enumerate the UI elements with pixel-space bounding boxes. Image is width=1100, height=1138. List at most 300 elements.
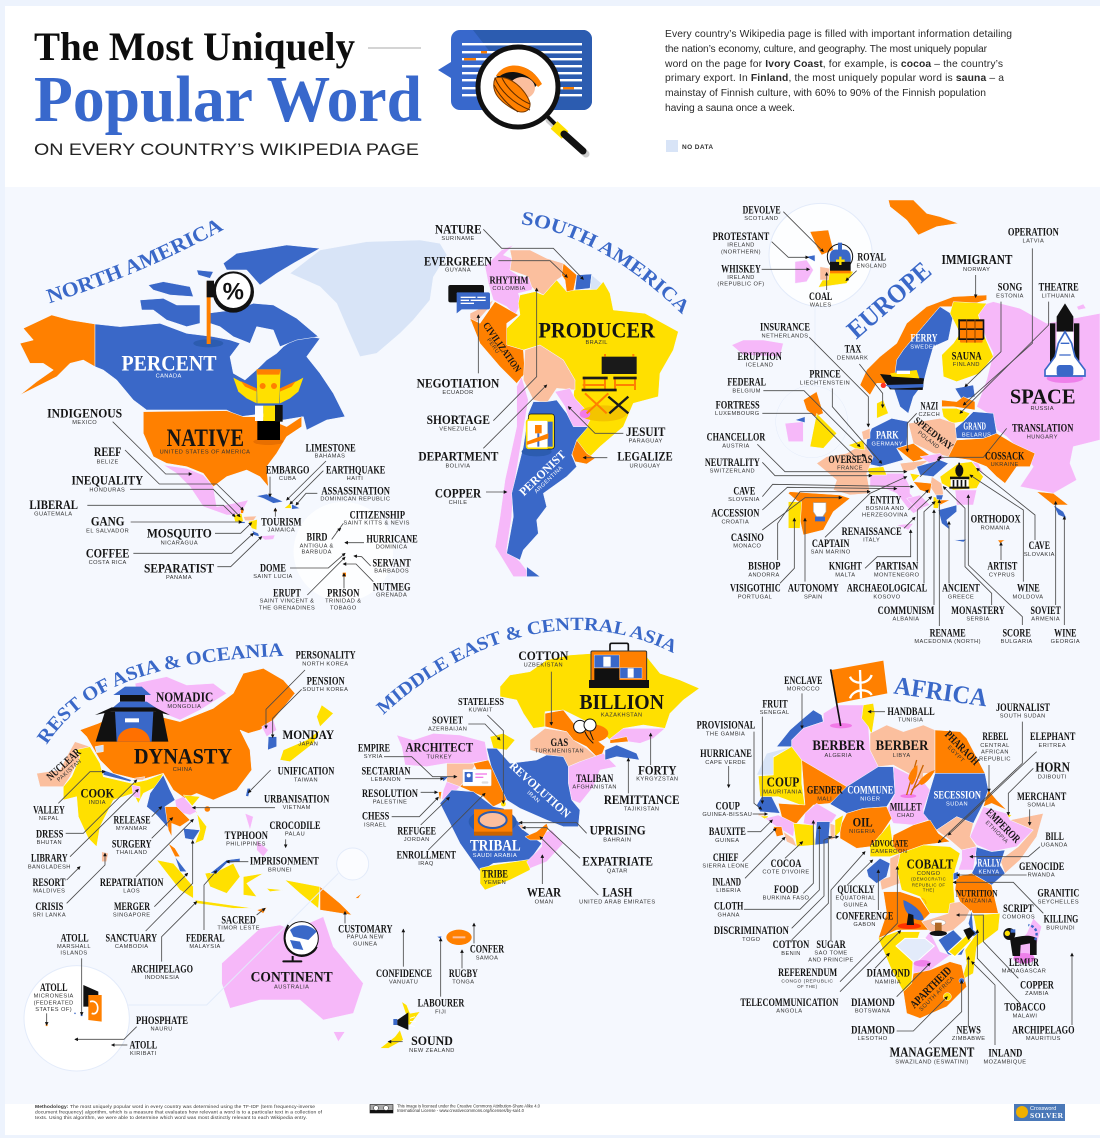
label: Rename, Macedonia (North): MACEDONIA (NORTH) — [914, 639, 981, 645]
label: Autonomy, Spain: SPAIN — [804, 595, 823, 601]
label: Empire, Syria: SYRIA — [364, 754, 383, 760]
label: Cave, Slovenia: SLOVENIA — [728, 497, 760, 503]
leader lines — [87, 422, 373, 595]
label: Lash, UAE: UNITED ARAB EMIRATES — [579, 899, 656, 905]
label: Coup, Guinea-Bissau: COUP — [715, 800, 740, 812]
icon: speech bubble with magnifying glass over cocoa bean — [438, 30, 592, 154]
label: Diamond, Namibia — [867, 968, 910, 985]
label: Servant, Barbados: SERVANT — [372, 557, 411, 569]
icon: percent sign: % — [223, 278, 244, 305]
label: Theatre, Lithuania — [1039, 282, 1079, 299]
label: Commune, Niger: COMMUNE — [847, 784, 893, 796]
label: Renaissance, Italy — [842, 526, 902, 544]
label: Tourism, Jamaica: TOURISM — [261, 517, 302, 529]
label: Labourer, Fiji — [418, 998, 465, 1015]
label: Monastery, Serbia: SERBIA — [966, 617, 990, 623]
label: Bill, Uganda — [1041, 831, 1068, 848]
icon: Creative Commons badge — [370, 1104, 393, 1113]
label: Archipelago, Mauritius — [1012, 1024, 1075, 1042]
label: Reef, Belize: BELIZE — [97, 459, 119, 465]
label: Native, USA: NATIVE — [167, 424, 244, 452]
label: Translation, Hungary: HUNGARY — [1027, 434, 1058, 440]
label: Eruption, Iceland: ICELAND — [746, 363, 773, 369]
label: Soviet, Azerbaijan — [428, 716, 467, 732]
label: Bill, Uganda: BILL — [1045, 831, 1064, 843]
logo: Crossword Solver: Crossword — [1030, 1106, 1056, 1112]
label: Bird, Antigua & Barbuda: BARBUDA — [301, 550, 332, 556]
label: Song, Estonia: ESTONIA — [996, 293, 1024, 299]
label: Federal, Belgium: FEDERAL — [727, 377, 766, 389]
label: Rally, Kenya: KENYA — [979, 869, 999, 875]
label: Secession, Sudan — [934, 790, 982, 807]
label: Hurricane, Cape Verde — [700, 748, 752, 766]
label: Negotiation, Ecuador: NEGOTIATION — [417, 376, 499, 390]
label: Telecommunication, Angola: TELECOMMUNICATION — [740, 997, 839, 1009]
label: Artist, Cyprus: ARTIST — [987, 560, 1018, 572]
label: Forty, Kyrgyzstan: FORTY — [638, 763, 676, 777]
label: Atoll, Micronesia — [34, 982, 74, 1013]
label: Space, Russia: RUSSIA — [1030, 406, 1054, 412]
label: Journalist, South Sudan: SOUTH SUDAN — [1000, 714, 1046, 720]
label: Prison, Trinidad & Tobago — [325, 587, 362, 611]
label: Surgery, Thailand: THAILAND — [116, 850, 147, 856]
label: Cotton, Uzbekistan: COTTON — [518, 649, 568, 663]
label: Enrollment, Iraq: ENROLLMENT — [397, 849, 456, 861]
label: Dynasty, China: CHINA — [173, 767, 193, 773]
label: Crocodile, Palau — [269, 820, 320, 838]
label: Chess, Israel: ISRAEL — [364, 822, 387, 828]
label: Casino, Monaco: CASINO — [731, 532, 764, 544]
label: Confer, Samoa: CONFER — [470, 944, 505, 956]
label: Journalist, South Sudan — [996, 702, 1050, 720]
icon: ferry — [880, 370, 924, 390]
text block: introduction: the nation’s economy, culture, and geography. The most uniquely popular — [665, 44, 988, 55]
label: Expatriate, Qatar: QATAR — [607, 868, 628, 874]
label: Uprising, Bahrain: UPRISING — [590, 824, 646, 838]
label: Coup, Mauritania — [763, 776, 802, 796]
label: Department, Bolivia: BOLIVIA — [445, 463, 471, 469]
label: Partisan, Montenegro — [874, 560, 920, 578]
label: Sacred, Timor Leste: SACRED — [221, 914, 256, 926]
heading: Africa: AFRICA — [892, 672, 990, 712]
label: Advocate, Cameroon: CAMEROON — [871, 849, 907, 855]
icon: pagoda gate — [95, 687, 170, 742]
label: Quickly, Equatorial Guinea: QUICKLY — [837, 884, 875, 896]
label: Inland, Liberia — [712, 876, 741, 894]
label: Casino, Monaco — [731, 532, 764, 550]
label: Phosphate, Nauru: NAURU — [151, 1026, 173, 1032]
label: Killing, Burundi — [1044, 914, 1078, 931]
label: Nuclear, Pakistan: NUCLEAR — [45, 746, 84, 783]
icon: percent sign — [193, 271, 254, 347]
text block: introduction: word on the page for Ivory Coast, for example, is cocoa – the country’s — [664, 59, 1003, 70]
label: Refugee, Jordan — [397, 825, 436, 843]
label: Cobalt, Congo (DRC): COBALT — [907, 856, 953, 871]
icon: millet — [900, 760, 935, 798]
label: Phosphate, Nauru — [136, 1015, 188, 1032]
label: Coal, Wales: WALES — [810, 303, 832, 309]
icon: tribal carpet — [469, 809, 517, 836]
label: Whiskey, Ireland (Republic of): WHISKEY — [721, 263, 761, 275]
label: Quickly, Equatorial Guinea: EQUATORIAL — [836, 896, 876, 902]
map: North America — [20, 240, 447, 602]
label: Inequality, Honduras: INEQUALITY — [71, 474, 143, 488]
panel: Europe — [705, 200, 1100, 645]
label: Inland, Mozambique: MOZAMBIQUE — [983, 1060, 1026, 1066]
label: Merger, Singapore — [113, 901, 151, 919]
label: Indigenous, Mexico: MEXICO — [72, 420, 97, 426]
label: Rebel, Central African Republic — [979, 731, 1011, 762]
label: Shortage, Venezuela — [427, 413, 490, 433]
label: Communism, Albania: ALBANIA — [893, 617, 919, 623]
label: Soviet, Armenia: SOVIET — [1030, 605, 1061, 617]
label: Nomadic, Mongolia: NOMADIC — [156, 690, 213, 705]
label: Atoll, Micronesia: STATES OF) — [35, 1007, 72, 1013]
label: Gas, Turkmenistan: GAS — [550, 737, 568, 749]
label: Producer, Brazil: BRAZIL — [585, 340, 608, 346]
label: Diamond, Lesotho — [851, 1024, 895, 1042]
leader lines — [384, 672, 651, 1042]
label: Food, Burkina Faso — [763, 884, 810, 902]
label: Referendum, Congo (Republic of the): REFERENDUM — [778, 967, 837, 979]
label: Millet, Chad: CHAD — [897, 813, 915, 819]
label: Rally, Kenya: RALLY — [977, 858, 1000, 870]
label: Chancellor, Austria — [707, 432, 766, 449]
label: Federal, Belgium: BELGIUM — [732, 388, 761, 394]
label: Hurricane, Dominica — [366, 533, 418, 551]
label: Overseas, France: FRANCE — [837, 466, 863, 472]
icon: satellite dish — [898, 898, 926, 929]
label: Nutmeg, Grenada: NUTMEG — [373, 581, 411, 593]
label: Citizenship, Saint Kitts & Nevis: SAINT KITTS & NEVIS — [344, 521, 410, 527]
label: Coup, Guinea-Bissau — [702, 800, 752, 818]
label: Ancient, Greece — [942, 583, 980, 601]
label: Shortage, Venezuela: VENEZUELA — [439, 427, 477, 433]
label: Theatre, Lithuania: THEATRE — [1039, 282, 1079, 294]
label: Wear, Oman: OMAN — [535, 899, 553, 905]
label: Cobalt, Congo (DRC): CONGO — [917, 871, 941, 877]
label: Erupt, Saint Vincent & the Grenadines — [259, 588, 315, 611]
label: Continent, Australia: AUSTRALIA — [274, 985, 309, 991]
label: Monday, Japan: MONDAY — [282, 728, 334, 742]
panel: Middle East & Central Asia — [358, 618, 700, 1054]
label: Park, Germany: PARK — [876, 430, 899, 442]
label: Dress, Bhutan — [36, 829, 63, 846]
label: Rebel, Central African Republic: REBEL — [982, 731, 1009, 743]
icon: spool — [930, 920, 947, 936]
label: Typhoon, Philippines: TYPHOON — [225, 830, 269, 842]
label: Tax, Denmark — [837, 344, 868, 361]
label: Dome, Saint Lucia — [253, 563, 293, 580]
label: Space, Russia: SPACE — [1010, 384, 1075, 408]
label: Coffee, Costa Rica: COFFEE — [86, 546, 129, 560]
label: News, Zimbabwe: ZIMBABWE — [952, 1036, 985, 1042]
text block: introduction: Every country’s Wikipedia page is filled with important information detailing — [665, 29, 1012, 40]
label: Neutrality, Switzerland — [705, 457, 760, 475]
label: Chancellor, Austria: CHANCELLOR — [707, 432, 766, 444]
label: Wear, Oman: WEAR — [527, 886, 562, 900]
label: Resort, Maldives — [32, 877, 66, 895]
label: Imprisonment, Brunei: BRUNEI — [268, 867, 292, 873]
label: Nuclear, Pakistan — [45, 746, 88, 787]
label: Prison, Trinidad & Tobago: PRISON — [327, 587, 360, 599]
label: Federal, Malaysia: MALAYSIA — [189, 944, 221, 950]
title — [34, 24, 422, 159]
label: Casino, Monaco: MONACO — [733, 544, 762, 550]
label: Speedway, Poland: POLAND — [916, 430, 940, 451]
label: Fortress, Luxembourg: LUXEMBOURG — [715, 411, 760, 417]
label: Nutrition, Tanzania — [956, 890, 998, 905]
label: Continent, Australia: CONTINENT — [251, 970, 333, 986]
label: Typhoon, Philippines — [225, 830, 269, 848]
legend: no data — [666, 140, 713, 152]
label: Imprisonment, Brunei — [250, 855, 319, 873]
label: Management, Swaziland (Eswatini) — [890, 1045, 974, 1066]
label: Communism, Albania: COMMUNISM — [878, 605, 935, 617]
label: Percent, Canada: CANADA — [156, 374, 182, 380]
label: News, Zimbabwe — [952, 1024, 985, 1042]
label: Separatist, Panama — [144, 561, 214, 581]
label: Unification, Taiwan: TAIWAN — [294, 777, 318, 783]
label: Nutrition, Tanzania: TANZANIA — [961, 899, 992, 905]
label: Insurance, Netherlands: NETHERLANDS — [762, 333, 808, 339]
label: Rebel, Central African Republic: CENTRAL — [980, 743, 1010, 749]
label: Provisional, The Gambia: PROVISIONAL — [697, 720, 756, 732]
label: Conference, Gabon — [836, 910, 893, 928]
label: Cocoa, Cote d'Ivoire — [762, 858, 810, 876]
label: Jesuit, Paraguay — [626, 425, 666, 445]
label: Rebel, Central African Republic: REPUBLIC — [979, 756, 1011, 762]
label: Dress, Bhutan: DRESS — [36, 829, 63, 841]
label: Pension, South Korea: PENSION — [307, 675, 345, 687]
label: Archaeological, Kosovo — [847, 583, 927, 601]
label: Cloth, Ghana: GHANA — [718, 912, 740, 918]
label: Prince, Liechtenstein: LIECHTENSTEIN — [800, 380, 850, 386]
label: Negotiation, Ecuador — [417, 376, 499, 396]
label: Customary, Papua New Guinea: PAPUA NEW — [347, 935, 384, 941]
label: Peronist, Argentina: PERONIST — [516, 447, 569, 499]
label: Evergreen, Guyana — [424, 254, 492, 274]
label: Apartheid, South Africa: APARTHEID — [908, 965, 954, 1011]
label: Repatriation, Laos: LAOS — [123, 889, 140, 895]
label: Orthodox, Romania: ORTHODOX — [971, 514, 1021, 526]
label: Indigenous, Mexico: INDIGENOUS — [47, 406, 122, 420]
label: Archipelago, Mauritius: ARCHIPELAGO — [1012, 1024, 1075, 1036]
label: Cave, Slovenia — [728, 485, 760, 503]
label: Gender, Mali: GENDER — [807, 784, 843, 796]
label: Killing, Burundi: BURUNDI — [1046, 925, 1075, 931]
label: Separatist, Panama: PANAMA — [166, 575, 192, 581]
label: Elephant, Eritrea: ERITREA — [1039, 743, 1066, 749]
label: Federal, Malaysia — [186, 932, 225, 950]
label: Revolution, Iran: IRAN — [525, 790, 541, 805]
label: Oil, Nigeria — [849, 816, 875, 835]
label: Chief, Sierra Leone: CHIEF — [713, 852, 739, 864]
label: Provisional, The Gambia — [697, 720, 756, 737]
label: Inland, Mozambique — [983, 1048, 1026, 1066]
label: Crisis, Sri Lanka: CRISIS — [35, 901, 63, 913]
label: Archipelago, Mauritius: MAURITIUS — [1026, 1036, 1061, 1042]
label: Monday, Japan: JAPAN — [298, 742, 318, 748]
label: Bauxite, Guinea — [709, 826, 746, 844]
label: Hurricane, Dominica: HURRICANE — [366, 533, 418, 545]
label: Merchant, Somalia: SOMALIA — [1027, 803, 1055, 809]
label: Translation, Hungary — [1012, 423, 1074, 440]
label: Crisis, Sri Lanka: SRI LANKA — [33, 913, 66, 919]
label: Sound, New Zealand: NEW ZEALAND — [409, 1048, 455, 1054]
map: Europe — [732, 200, 1100, 543]
label: Dress, Bhutan: BHUTAN — [37, 840, 62, 846]
label: Nomadic, Mongolia: MONGOLIA — [167, 704, 201, 710]
icon: diamond — [896, 938, 934, 967]
label: Nature, Suriname — [435, 222, 482, 242]
label: Wine, Moldova — [1013, 583, 1043, 601]
label: Enrollment, Iraq — [397, 849, 456, 867]
label: Producer, Brazil: PRODUCER — [538, 317, 656, 342]
label: Evergreen, Guyana: GUYANA — [445, 268, 471, 274]
label: Bill, Uganda: UGANDA — [1041, 842, 1068, 848]
label: Rhythm, Colombia: RHYTHM — [489, 275, 529, 286]
icon: sauna bucket — [958, 319, 984, 343]
label: Tribal, Saudi Arabia: TRIBAL — [470, 838, 521, 855]
label: Fortress, Luxembourg: FORTRESS — [716, 399, 760, 411]
label: Uprising, Bahrain — [590, 824, 646, 843]
label: Artist, Cyprus — [987, 560, 1018, 578]
label: Pharaoh, Egypt: PHARAOH — [942, 729, 981, 768]
label: Nature, Suriname: NATURE — [435, 222, 482, 236]
label: Horn, Djibouti: DJIBOUTI — [1038, 774, 1067, 780]
label: Cook, India: COOK — [80, 787, 114, 801]
icon: Micronesia flag — [83, 985, 102, 1022]
label: Cloth, Ghana — [714, 901, 743, 918]
label: Orthodox, Romania: ROMANIA — [981, 526, 1010, 532]
icon: space shuttle — [1045, 303, 1085, 383]
heading: Middle East & Central Asia: MIDDLE EAST & CENTRAL ASIA — [376, 618, 674, 715]
label: Fruit, Senegal: SENEGAL — [760, 710, 790, 716]
label: Reef, Belize — [94, 445, 122, 465]
label: Erupt, Saint Vincent & the Grenadines: ERUPT — [273, 588, 301, 600]
label: Servant, Barbados — [372, 557, 411, 575]
label: Pension, South Korea: SOUTH KOREA — [302, 687, 348, 693]
label: Devolve, Scotland: DEVOLVE — [743, 204, 781, 216]
label: Genocide, Rwanda: RWANDA — [1028, 873, 1055, 879]
label: Billion, Kazakhstan: BILLION — [579, 690, 665, 714]
text block: introduction: primary export. In Finland, the most uniquely popular word is sauna – a — [665, 73, 1004, 84]
label: Coal, Wales: COAL — [809, 291, 833, 303]
icon: cotton plant — [572, 719, 608, 743]
label: Archipelago, Indonesia: ARCHIPELAGO — [131, 963, 193, 975]
text block: methodology: document frequency) algorithm, which is a measure that evaluates how relevant a word is to a particular text in a collection of — [35, 1110, 323, 1116]
label: Gas, Turkmenistan: TURKMENISTAN — [535, 748, 584, 754]
label: Legalize, Uruguay: LEGALIZE — [617, 450, 673, 464]
label: Sauna, Finland — [952, 350, 982, 368]
label: Empire, Syria: EMPIRE — [358, 743, 390, 755]
label: Legalize, Uruguay: URUGUAY — [630, 463, 660, 469]
label: Food, Burkina Faso: BURKINA FASO — [763, 896, 810, 902]
label: Operation, Latvia — [1008, 227, 1059, 244]
label: Cobalt, Congo (DRC): (DEMOCRATIC — [911, 877, 946, 882]
label: Renaissance, Italy: ITALY — [863, 538, 880, 544]
label: Hurricane, Cape Verde: HURRICANE — [700, 748, 752, 760]
label: Journalist, South Sudan: JOURNALIST — [996, 702, 1050, 714]
label: Prison, Trinidad & Tobago: TRINIDAD & — [325, 599, 362, 605]
label: Prince, Liechtenstein — [800, 369, 850, 386]
label: Handball, Tunisia: TUNISIA — [898, 717, 923, 723]
label: Genocide, Rwanda — [1019, 861, 1064, 879]
label: Millet, Chad — [890, 801, 922, 819]
label: Taliban, Afghanistan: AFGHANISTAN — [572, 785, 617, 791]
label: Stateless, Kuwait: STATELESS — [458, 697, 504, 708]
icon: tobacco bottle — [948, 927, 975, 957]
label: Visigothic, Portugal: VISIGOTHIC — [730, 583, 781, 595]
label: Copper, Chile: CHILE — [449, 500, 467, 506]
icon: speech bubbles — [448, 285, 490, 313]
map: Middle East and Central Asia — [380, 653, 699, 1048]
label: Personality, North Korea — [296, 650, 356, 667]
label: Royal, England: ENGLAND — [856, 264, 887, 270]
label: Gas, Turkmenistan — [535, 737, 584, 754]
icon: megaphone — [393, 1012, 416, 1030]
label: Song, Estonia — [996, 282, 1024, 299]
label: Citizenship, Saint Kitts & Nevis — [344, 509, 410, 527]
label: Sugar, Sao Tome and Principe: AND PRINCIPE — [808, 957, 854, 963]
label: Soviet, Azerbaijan: SOVIET — [432, 716, 463, 727]
label: Cossack, Ukraine: COSSACK — [985, 450, 1024, 462]
label: Management, Swaziland (Eswatini): MANAGEMENT — [890, 1045, 974, 1060]
label: Devolve, Scotland — [743, 204, 781, 222]
label: Merger, Singapore: SINGAPORE — [113, 913, 150, 919]
label: Atoll, Micronesia: MICRONESIA — [34, 994, 74, 1000]
leader lines — [729, 693, 1072, 1045]
label: Assassination, Dominican Republic: DOMINICAN REPUBLIC — [320, 497, 390, 503]
label: Coffee, Costa Rica: COSTA RICA — [89, 560, 127, 566]
heading: South America: SOUTH AMERICA — [522, 212, 686, 314]
label: Visigothic, Portugal — [730, 583, 781, 601]
label: Confer, Samoa — [470, 944, 505, 961]
label: Sugar, Sao Tome and Principe: SAO TOME — [814, 951, 848, 957]
label: Entity, Bosnia and Herzegovina: BOSNIA AND — [866, 506, 904, 512]
label: Nuclear, Pakistan: PAKISTAN — [56, 758, 83, 783]
label: Evergreen, Guyana: EVERGREEN — [424, 254, 492, 268]
label: Cave, Slovakia: SLOVAKIA — [1024, 552, 1055, 558]
label: Gang, El Salvador: EL SALVADOR — [86, 528, 129, 534]
label: Bird, Antigua & Barbuda: BIRD — [306, 532, 327, 544]
label: Erupt, Saint Vincent & the Grenadines: SAINT VINCENT & — [260, 599, 314, 605]
label: Earthquake, Haiti — [326, 465, 385, 482]
label: Soviet, Azerbaijan: AZERBAIJAN — [428, 726, 467, 732]
label: Translation, Hungary: TRANSLATION — [1012, 423, 1074, 435]
label: Song, Estonia: SONG — [998, 282, 1022, 294]
label: Lemur, Madagascar: LEMUR — [1009, 957, 1040, 969]
label: Referendum, Congo (Republic of the): OF THE) — [797, 984, 818, 989]
label: Bishop, Andorra: ANDORRA — [748, 572, 780, 578]
label: Crocodile, Palau: PALAU — [285, 832, 305, 838]
label: Immigrant, Norway: IMMIGRANT — [941, 252, 1013, 267]
text block: introduction — [664, 29, 1012, 114]
label: Hurricane, Cape Verde: CAPE VERDE — [705, 760, 746, 766]
label: Inland, Mozambique: INLAND — [988, 1048, 1022, 1060]
label: Autonomy, Spain: AUTONOMY — [788, 583, 839, 595]
label: Urbanisation, Vietnam: URBANISATION — [264, 793, 330, 805]
label: Lash, UAE: LASH — [602, 886, 632, 900]
icon: totem pole — [233, 369, 303, 445]
label: Limestone, Bahamas: BAHAMAS — [315, 454, 345, 460]
label: Gang, El Salvador: GANG — [91, 515, 125, 529]
label: Gender, Mali — [807, 784, 843, 802]
label: Berber, Libya: LIBYA — [893, 753, 911, 759]
label: Release, Myanmar — [113, 814, 150, 832]
label: Dome, Saint Lucia: SAINT LUCIA — [253, 574, 293, 580]
